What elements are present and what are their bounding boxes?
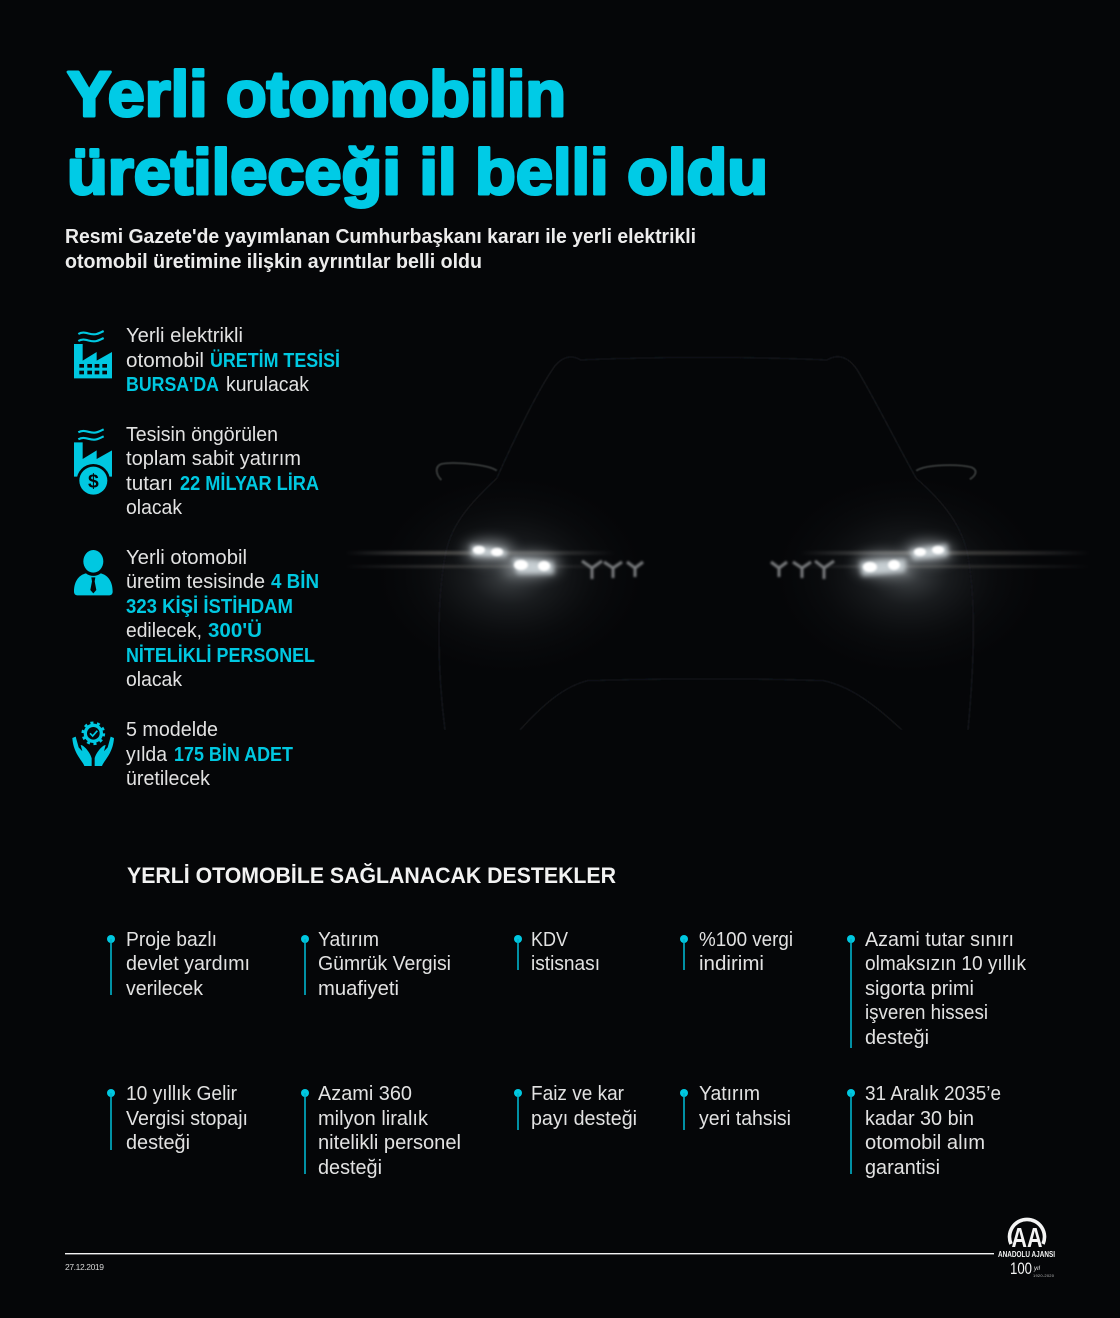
support: project based state aid	[107, 929, 250, 1000]
text: investment: olacak	[126, 497, 183, 519]
Anadolu Ajansı logo: ANADOLU AJANSI	[998, 1250, 1055, 1259]
support: investment site allocation: Yatırım	[699, 1083, 760, 1105]
support: interest and profit share	[514, 1083, 637, 1130]
icon: hands holding gear	[72, 723, 114, 766]
text: employment: Yerli otomobil	[126, 547, 247, 569]
title: üretileceği il belli oldu	[67, 136, 768, 208]
text: investment	[126, 424, 319, 519]
support: qualified personnel: desteği	[318, 1157, 382, 1179]
date: 27.12.2019	[65, 1262, 104, 1272]
text: annual production: 175 BİN ADET	[174, 743, 293, 766]
section heading: YERLİ OTOMOBİLE SAĞLANACAK DESTEKLER	[127, 863, 616, 888]
headlight glow	[375, 475, 1043, 675]
support: purchase guarantee	[847, 1083, 1001, 1179]
support: customs exemption: Yatırım	[318, 929, 379, 951]
text: investment: Tesisin öngörülen	[126, 424, 278, 446]
support: project based state aid: devlet yardımı	[126, 953, 250, 975]
left headlight	[465, 541, 560, 576]
text: investment: 22 MİLYAR LİRA	[180, 472, 319, 495]
footer rule	[65, 1253, 994, 1254]
text: annual production: yılda	[126, 744, 168, 766]
grille emblems	[582, 561, 834, 579]
text: production facility: kurulacak	[226, 374, 310, 396]
text: employment: edilecek,	[126, 620, 202, 642]
icon: factory with dollar coin	[74, 429, 112, 497]
title: Yerli otomobilin	[67, 58, 566, 130]
subtitle: Resmi Gazete'de yayımlanan Cumhurbaşkanı kararı ile yerli elektrikli	[65, 226, 696, 248]
support: investment site allocation	[680, 1083, 791, 1130]
support: purchase guarantee: kadar 30 bin	[865, 1108, 974, 1130]
text: investment: tutarı	[126, 473, 173, 495]
text: employment: üretim tesisinde	[126, 571, 265, 593]
text: production facility: ÜRETİM TESİSİ	[210, 349, 340, 372]
text: production facility: Yerli elektrikli	[126, 325, 243, 347]
support: customs exemption	[301, 929, 451, 1000]
support: VAT exemption	[514, 929, 600, 975]
support: tax reduction	[680, 929, 793, 975]
support: investment site allocation: yeri tahsisi	[699, 1108, 791, 1130]
Anadolu Ajansı logo: yıl	[1033, 1266, 1041, 1272]
text: investment: toplam sabit yatırım	[126, 448, 301, 470]
support: interest and profit share: Faiz ve kar	[531, 1083, 624, 1105]
support: insurance premium	[847, 929, 1027, 1049]
Anadolu Ajansı logo: AA	[1012, 1222, 1042, 1253]
title	[67, 58, 768, 208]
text: employment: NİTELİKLİ PERSONEL	[126, 644, 315, 667]
support: insurance premium: sigorta primi	[865, 978, 974, 1000]
support: qualified personnel: Azami 360	[318, 1083, 412, 1105]
text: employment: 300'Ü	[208, 619, 262, 642]
support: income tax withholding: desteği	[126, 1132, 190, 1154]
Anadolu Ajansı logo: 100	[1010, 1259, 1032, 1278]
support: customs exemption: muafiyeti	[318, 978, 399, 1000]
support: VAT exemption: istisnası	[531, 953, 600, 975]
right headlight	[856, 542, 953, 576]
support: qualified personnel: nitelikli personel	[318, 1132, 461, 1154]
support: income tax withholding: Vergisi stopajı	[126, 1108, 248, 1130]
icon: factory	[74, 331, 112, 378]
support: interest and profit share: payı desteği	[531, 1108, 637, 1130]
text: production facility: otomobil	[126, 350, 204, 372]
support: tax reduction: %100 vergi	[699, 929, 793, 951]
support: insurance premium: olmaksızın 10 yıllık	[865, 953, 1027, 975]
support: insurance premium: işveren hissesi	[865, 1002, 988, 1024]
support: income tax withholding: 10 yıllık Gelir	[126, 1083, 237, 1105]
support: customs exemption: Gümrük Vergisi	[318, 953, 451, 975]
text: annual production: üretilecek	[126, 768, 211, 790]
text: employment	[126, 547, 319, 691]
text: annual production	[126, 719, 293, 790]
car body outline	[437, 357, 976, 730]
support: purchase guarantee: 31 Aralık 2035’e	[865, 1083, 1001, 1105]
text: production facility	[126, 325, 340, 396]
support: qualified personnel: milyon liralık	[318, 1108, 429, 1130]
Anadolu Ajansı logo: 1920-2020	[1033, 1273, 1055, 1278]
support: purchase guarantee: garantisi	[865, 1157, 940, 1179]
support: project based state aid: Proje bazlı	[126, 929, 217, 951]
subtitle	[65, 226, 696, 273]
icon: employee	[74, 550, 113, 595]
support: project based state aid: verilecek	[126, 978, 204, 1000]
support: insurance premium: desteği	[865, 1027, 929, 1049]
support: income tax withholding	[107, 1083, 248, 1154]
text: employment: 4 BİN	[271, 570, 319, 593]
text: annual production: 5 modelde	[126, 719, 218, 741]
lens flares	[345, 551, 1090, 568]
text: employment: olacak	[126, 669, 183, 691]
text: employment: 323 KİŞİ İSTİHDAM	[126, 595, 293, 618]
icon: factory with dollar coin: $	[88, 471, 99, 492]
support: VAT exemption: KDV	[531, 929, 569, 951]
subtitle: otomobil üretimine ilişkin ayrıntılar belli oldu	[65, 251, 482, 273]
support: tax reduction: indirimi	[699, 953, 764, 975]
support: insurance premium: Azami tutar sınırı	[865, 929, 1014, 951]
Anadolu Ajansı logo	[998, 1219, 1055, 1278]
support: purchase guarantee: otomobil alım	[865, 1132, 985, 1154]
car silhouette with headlights	[345, 357, 1090, 730]
text: production facility: BURSA'DA	[126, 374, 219, 396]
support: qualified personnel	[301, 1083, 461, 1179]
